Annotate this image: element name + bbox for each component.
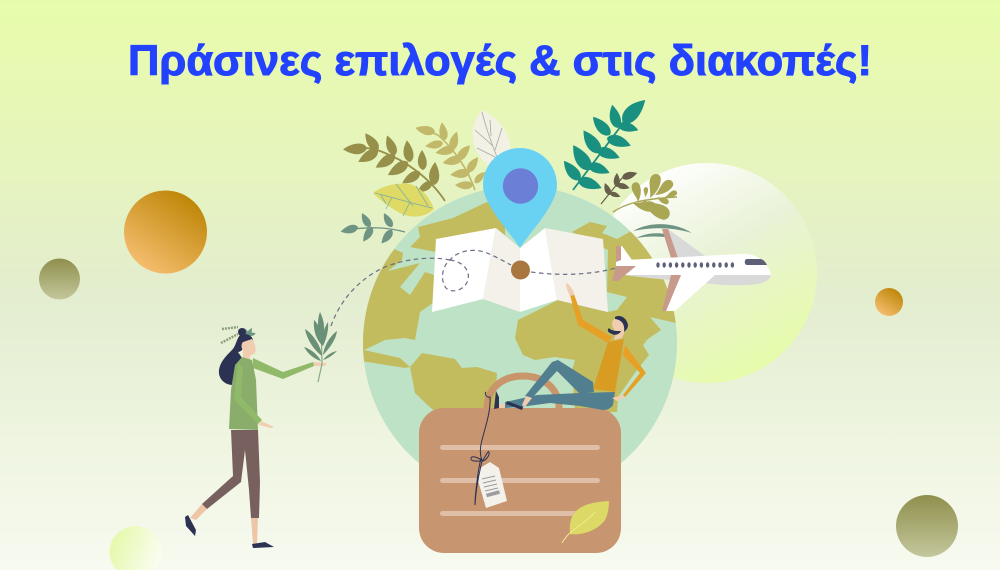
lower hand — [612, 395, 625, 401]
outstretched hand — [313, 362, 327, 366]
suitcase strap 2 — [440, 478, 600, 483]
neck and face — [612, 317, 626, 340]
suitcase strap 1 — [440, 445, 600, 450]
raised leg trousers — [525, 360, 594, 398]
hair — [219, 334, 253, 385]
suitcase — [419, 376, 621, 553]
far wing stripe — [662, 229, 678, 258]
globe water — [363, 186, 677, 500]
globe — [363, 190, 677, 463]
trousers — [202, 430, 260, 518]
lower hand — [259, 421, 274, 428]
near wing — [666, 275, 715, 311]
fern: sage — [340, 211, 405, 246]
map — [432, 228, 608, 312]
lowered arm — [234, 362, 262, 424]
suitcase strap 3 — [440, 511, 580, 516]
map panel 1 — [432, 228, 496, 312]
outstretched arm — [253, 358, 314, 379]
fuselage lower — [624, 275, 771, 285]
pin body — [483, 148, 557, 248]
hair sprig right — [242, 327, 256, 337]
airplane — [612, 229, 771, 311]
tail plane — [612, 266, 636, 281]
shoe — [506, 401, 523, 410]
hair sprig left — [221, 327, 238, 343]
near wing stripe — [662, 275, 681, 311]
location pin — [483, 148, 557, 248]
decorative circle: orange large — [124, 190, 207, 274]
luggage tag — [471, 392, 507, 508]
raised arm — [570, 294, 612, 343]
fuselage upper — [616, 254, 771, 275]
hair bun — [238, 328, 246, 336]
lower arm — [623, 345, 646, 397]
far ankle — [499, 404, 507, 408]
pin centre — [503, 168, 538, 204]
map panel 4 — [545, 228, 608, 312]
plant in hand — [304, 312, 337, 382]
location marker dot — [511, 260, 530, 280]
fern: dark brown — [601, 169, 638, 204]
back leg skin — [190, 504, 207, 520]
windows — [656, 262, 734, 268]
tag string — [471, 392, 490, 505]
map panel 2 — [483, 228, 520, 312]
decorative circle: olive small — [39, 258, 80, 300]
man reclining — [494, 283, 646, 410]
far wing — [662, 229, 705, 258]
leaf: beige — [473, 110, 510, 167]
fern: light olive — [414, 122, 487, 190]
suitcase body — [419, 408, 621, 553]
woman walking — [185, 327, 327, 548]
suitcase handle — [487, 376, 559, 410]
grass blades — [633, 224, 692, 238]
tag card — [477, 462, 507, 508]
dashed flight path — [331, 250, 616, 326]
front shoe — [252, 542, 274, 548]
fern: olive right — [613, 172, 678, 223]
tail fin stripe — [616, 246, 621, 262]
far shoe — [494, 391, 499, 409]
tag text lines — [482, 476, 500, 496]
foliage behind globe — [340, 95, 692, 246]
title: Πράσινες επιλογές & στις διακοπές! — [128, 37, 872, 85]
sweater — [229, 357, 258, 430]
raised hand — [566, 283, 574, 296]
fern: teal — [559, 95, 650, 193]
tail fin — [616, 246, 632, 265]
decorative circle: olive bottom right — [896, 495, 958, 557]
torso — [593, 339, 624, 392]
map panel 3 — [520, 228, 557, 312]
fern: olive left — [343, 131, 445, 201]
decorative circle: pale bottom left — [110, 526, 162, 570]
continents — [355, 202, 690, 412]
hair and beard — [608, 316, 628, 335]
face — [242, 339, 256, 360]
suitcase leaf — [562, 501, 609, 543]
back shoe — [185, 515, 196, 536]
front leg skin — [251, 518, 258, 544]
decorative circle: orange right — [875, 288, 903, 316]
cockpit — [745, 259, 767, 265]
lower leg trousers — [505, 392, 615, 410]
leaf: yellow — [373, 183, 434, 217]
ankle — [522, 396, 532, 407]
decorative circle: large pale sun — [597, 163, 817, 383]
